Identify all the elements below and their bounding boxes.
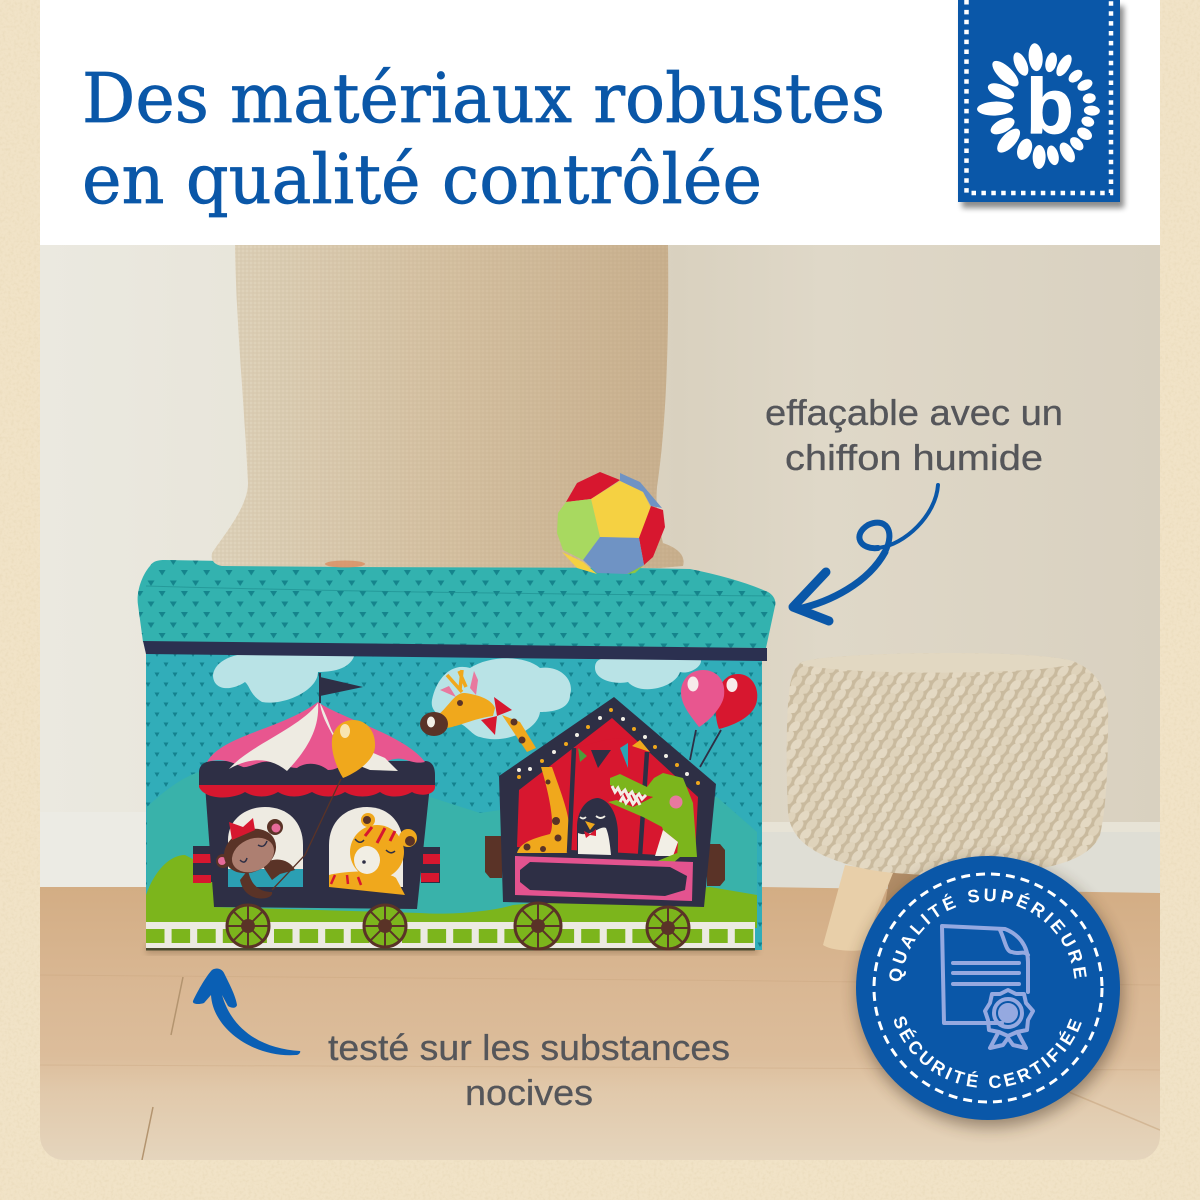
penguin bbox=[577, 798, 618, 855]
marquee lights bbox=[517, 708, 700, 785]
stool legs bbox=[823, 865, 925, 951]
callout text: tested: nocives bbox=[465, 1072, 593, 1113]
curtain interior bbox=[517, 718, 698, 857]
box body bbox=[138, 560, 775, 950]
wagon side bumpers bbox=[193, 846, 440, 883]
monkey bbox=[216, 818, 295, 899]
wheels bbox=[515, 903, 689, 949]
title bbox=[82, 60, 885, 220]
giraffe body bbox=[517, 767, 569, 853]
header panel bbox=[40, 0, 1160, 245]
baseboard bbox=[762, 822, 1160, 893]
bunting bbox=[578, 738, 650, 768]
wagon roof bbox=[199, 761, 435, 797]
green ground bbox=[146, 855, 757, 928]
arrow: to box lid bbox=[793, 485, 938, 621]
yellow balloon bbox=[272, 720, 375, 890]
badge text bottom: SÉCURITÉ CERTIFIÉE bbox=[894, 1016, 1082, 1088]
clouds bbox=[213, 653, 701, 739]
storage box bbox=[138, 245, 1132, 1136]
title: Des matériaux robustes bbox=[82, 60, 885, 139]
wall bbox=[40, 245, 1160, 822]
hills bbox=[147, 770, 757, 925]
tiger bbox=[329, 813, 417, 895]
logo petals bbox=[977, 43, 1100, 169]
giraffe head bbox=[420, 670, 536, 752]
wagon body bbox=[205, 785, 430, 909]
balloons bbox=[681, 670, 757, 767]
cage bars bbox=[569, 748, 647, 856]
logo letter: b bbox=[1026, 62, 1074, 150]
callout text: wipe clean bbox=[766, 398, 1061, 470]
left circus wagon bbox=[193, 673, 440, 947]
photo scene bbox=[40, 245, 1160, 1160]
circus canopy bbox=[207, 702, 425, 771]
railway track bbox=[146, 922, 755, 950]
callout text: wipe clean: chiffon humide bbox=[785, 437, 1043, 478]
callout text: wipe clean: effaçable avec un bbox=[765, 392, 1063, 433]
quality badge bbox=[848, 851, 1132, 1136]
title: en qualité contrôlée bbox=[82, 141, 762, 220]
box lid bbox=[138, 560, 775, 661]
wagon pink panel bbox=[515, 856, 693, 901]
stool bbox=[787, 653, 1108, 951]
callout text: tested: testé sur les substances bbox=[328, 1027, 730, 1068]
crocodile bbox=[608, 773, 697, 870]
pillow bbox=[212, 245, 684, 568]
wheels bbox=[227, 905, 406, 947]
wagon windows bbox=[228, 807, 403, 887]
badge text top: QUALITÉ SUPÉRIEURE bbox=[889, 888, 1087, 982]
callout text: tested bbox=[328, 1027, 730, 1113]
right circus wagon bbox=[485, 670, 757, 949]
ball bbox=[557, 472, 665, 574]
logo tag bbox=[958, 0, 1124, 208]
icon: certificate bbox=[942, 926, 1033, 1048]
arrow: to box bottom bbox=[193, 969, 300, 1055]
flag bbox=[320, 673, 363, 703]
wood floor bbox=[40, 887, 1160, 1160]
